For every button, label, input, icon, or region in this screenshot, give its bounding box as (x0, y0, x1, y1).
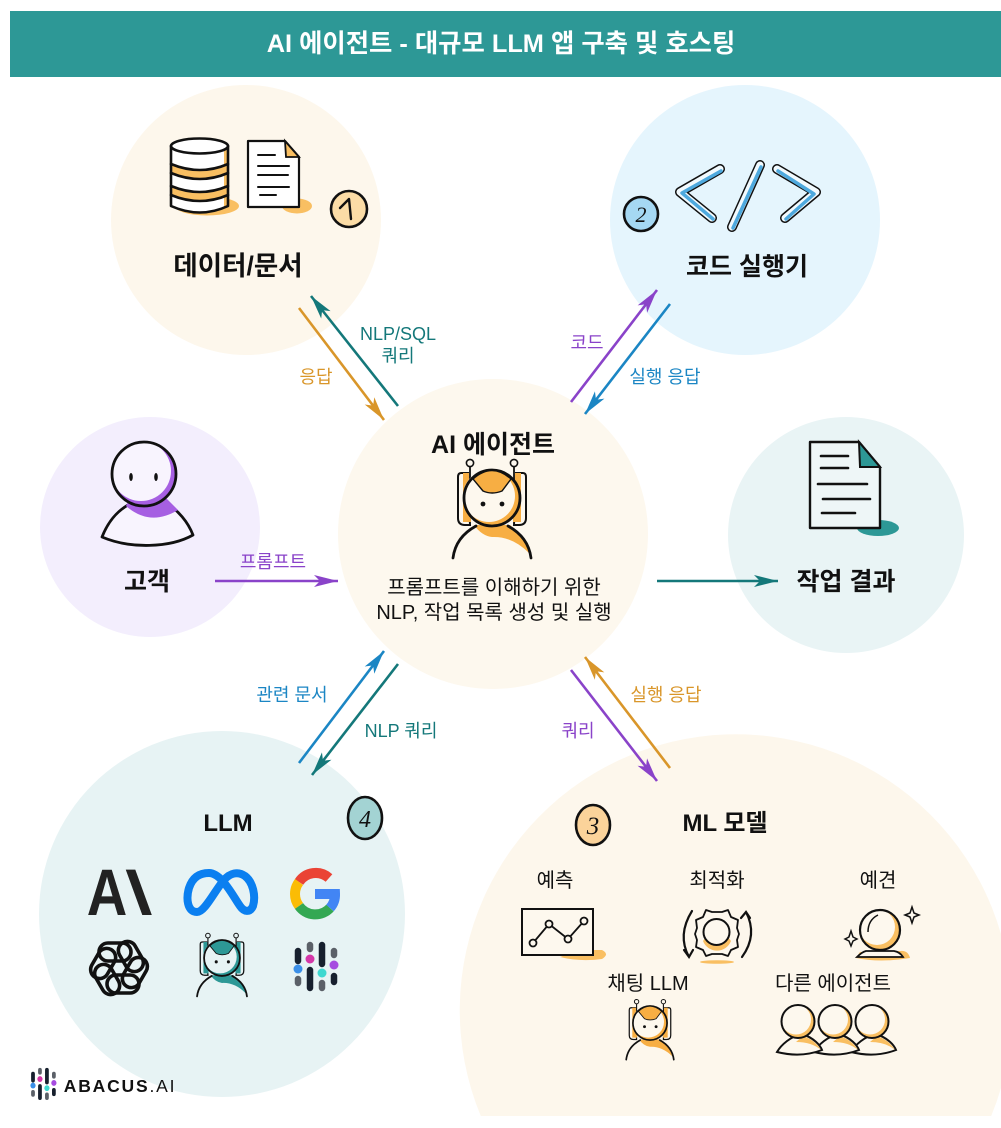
logo: Meta (188, 873, 254, 912)
heading: ML models: ML 모델 (682, 810, 768, 837)
logo: Anthropic: A (87, 856, 127, 929)
item: chat LLM: 채팅 LLM (607, 972, 689, 995)
heading: LLM: LLM (203, 810, 253, 837)
arrow: prompt (215, 580, 338, 582)
logo: Abacus (294, 945, 338, 988)
icon: teal robot (197, 933, 247, 996)
footer logo: Abacus.AI (30, 1070, 176, 1098)
label: NLP/SQL query: 쿼리 (381, 346, 415, 366)
arrow: model response (585, 657, 670, 768)
heading: AI agent: AI 에이전트 (431, 431, 555, 459)
item: other agents: 다른 에이전트 (775, 972, 891, 995)
item: optimization: 최적화 (689, 869, 745, 892)
badge: number 1 (331, 191, 367, 227)
badge: number 3 (576, 805, 610, 845)
panel: code runner (610, 85, 880, 355)
panel: LLM (39, 731, 405, 1097)
label: response: 응답 (299, 367, 333, 387)
arrow: data response (299, 308, 384, 420)
icon: result document (810, 442, 899, 536)
label: model execution response: 실행 응답 (630, 685, 702, 705)
heading: code runner: 코드 실행기 (686, 253, 808, 281)
arrow: code (571, 290, 657, 402)
header banner: AI 에이전트 - 대규모 LLM 앱 구축 및 호스팅 (267, 30, 735, 58)
arrow: NLP/SQL query (311, 296, 398, 406)
logo: OpenAI (87, 938, 151, 998)
badge: number 2: 2 (636, 202, 646, 227)
logo: Google (295, 873, 335, 914)
icon: agent robot (453, 459, 531, 558)
label: execution response: 실행 응답 (629, 367, 701, 387)
description: NLP, 작업 목록 생성 및 실행 (376, 601, 612, 624)
arrow: task result (657, 580, 778, 582)
item: optimization (684, 869, 751, 964)
arrow: query (571, 670, 657, 781)
footer logo: Abacus.AI: ABACUS.AI (64, 1076, 176, 1096)
panel: ML models (460, 734, 1001, 1116)
icon: person (102, 441, 193, 545)
item: forecast (522, 869, 606, 960)
heading: task result: 작업 결과 (797, 568, 895, 596)
panel: task result (728, 417, 964, 653)
label: code: 코드 (570, 333, 604, 353)
item: chat LLM (607, 972, 689, 1060)
icon: document (248, 141, 312, 214)
arrow: related documents (299, 651, 384, 763)
icon: code brackets (680, 165, 816, 228)
badge: number 2 (624, 197, 658, 231)
panel: data and documents (111, 85, 381, 355)
icon: database (171, 138, 239, 216)
description: 프롬프트를 이해하기 위한 (387, 576, 601, 599)
heading: data and documents: 데이터/문서 (173, 251, 303, 281)
arrow: NLP query (312, 664, 398, 775)
badge: number 3: 3 (586, 813, 599, 840)
label: related documents: 관련 문서 (256, 685, 328, 705)
arrow: execution response (585, 304, 670, 414)
badge: number 4 (348, 797, 382, 839)
label: NLP/SQL query (360, 324, 436, 366)
label: NLP/SQL query: NLP/SQL (360, 324, 436, 344)
item: forecast: 예측 (537, 869, 573, 892)
heading: customer: 고객 (124, 568, 170, 596)
header banner (10, 11, 1001, 77)
item: prediction crystal ball: 예견 (860, 869, 896, 892)
item: other agents (775, 972, 896, 1055)
panel: AI agent (338, 379, 648, 689)
icon: chat robot (626, 999, 674, 1060)
badge: number 4: 4 (359, 807, 371, 833)
label: query: 쿼리 (561, 721, 595, 741)
label: NLP query: NLP 쿼리 (365, 721, 437, 741)
description (376, 576, 612, 624)
logo: Anthropic: I (116, 856, 161, 930)
panel: customer (40, 417, 260, 637)
item: prediction crystal ball (845, 869, 919, 960)
logo: Anthropic (87, 856, 161, 930)
label: prompt: 프롬프트 (240, 552, 306, 572)
